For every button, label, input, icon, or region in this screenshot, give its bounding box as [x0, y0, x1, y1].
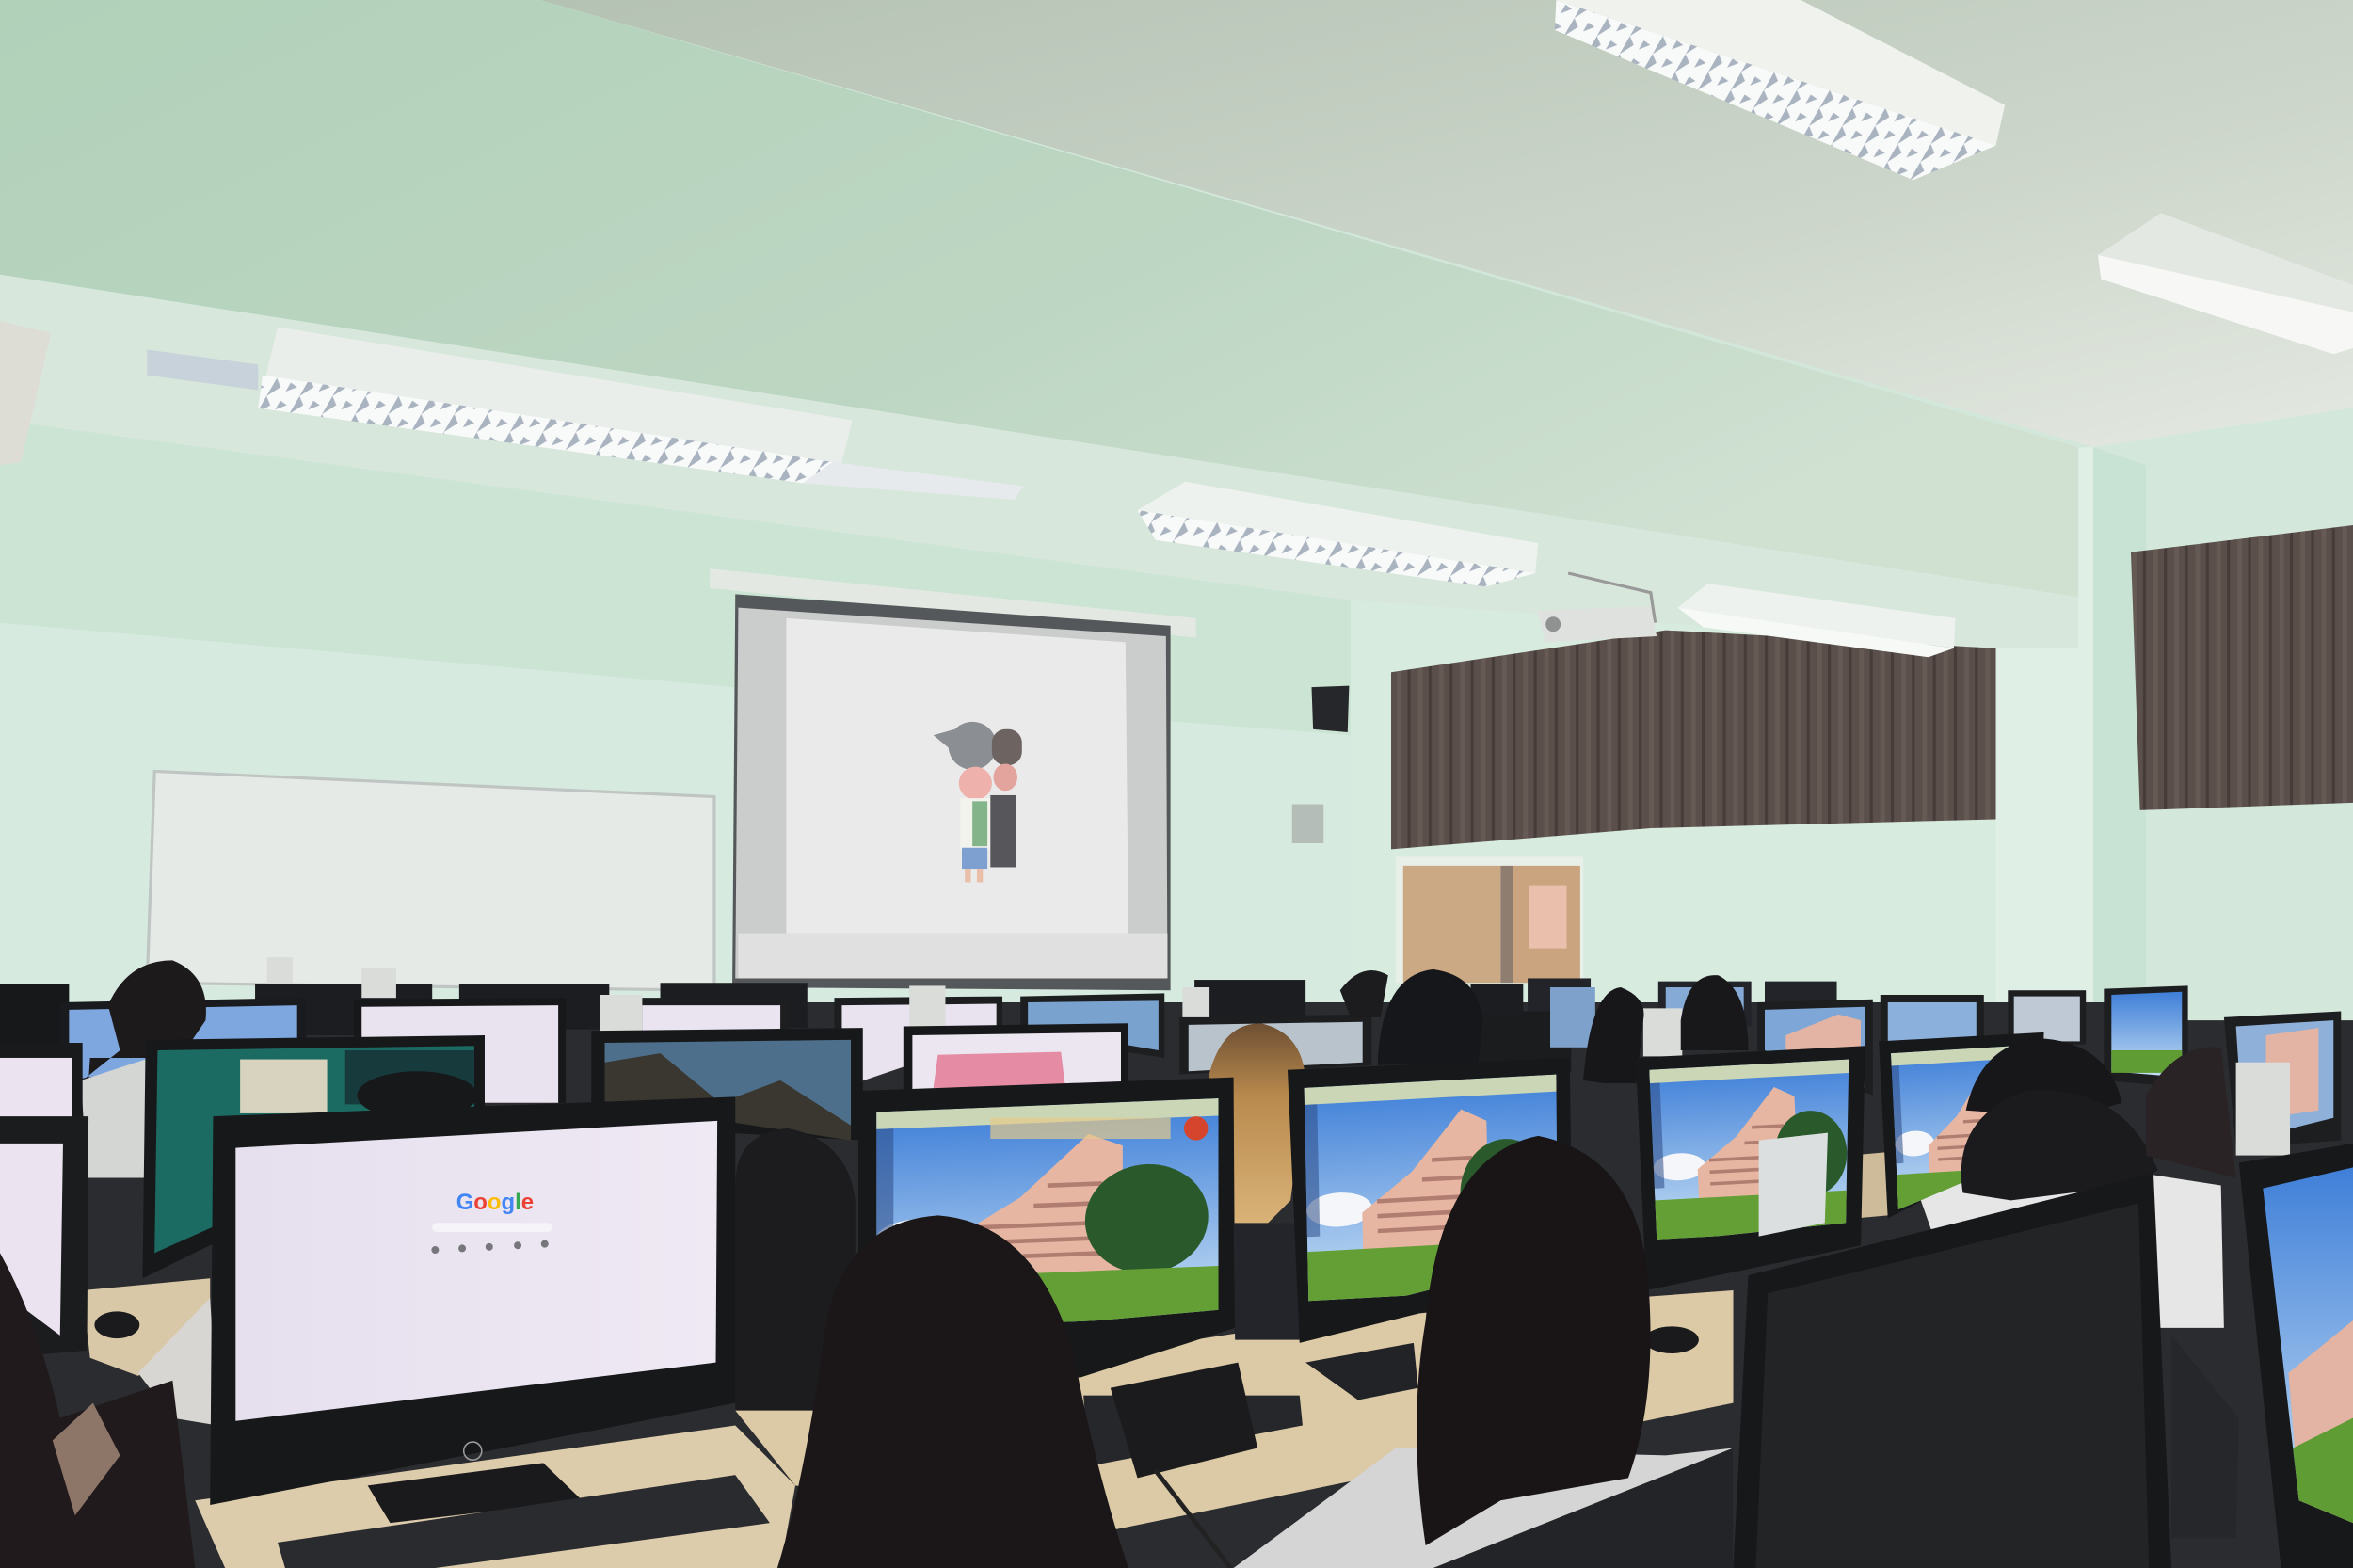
- back right desk: [1850, 1152, 1888, 1219]
- light: long left: [147, 328, 1023, 500]
- base dark floor zone: [0, 1002, 2353, 1568]
- paper notes on monitors: [267, 957, 2290, 1156]
- air conditioner: [0, 321, 51, 465]
- keyboard front: [278, 1475, 770, 1568]
- google wordmark: Google: [456, 1190, 534, 1215]
- wall switch box: [1292, 805, 1323, 843]
- chair grey: [1573, 1083, 1636, 1163]
- black hair student back: [1378, 969, 1482, 1065]
- center-right desk: [735, 1290, 1734, 1530]
- bulkhead face: [0, 0, 2078, 598]
- middle left person (white shirt): [81, 960, 206, 1177]
- mouse right: [1644, 1326, 1699, 1353]
- chair back right: [2171, 1336, 2239, 1538]
- projection screen: [710, 568, 1196, 990]
- upper front wall: [0, 420, 1396, 1002]
- blinds: side wall: [1391, 631, 1996, 849]
- ceiling: [540, 0, 2353, 447]
- column side: [2093, 447, 2146, 1002]
- left desk: [83, 1278, 210, 1376]
- stand: [368, 1463, 583, 1523]
- light: center: [1138, 482, 1538, 586]
- student: right long hair: [1234, 1136, 1734, 1568]
- light: top right: [1555, 0, 2005, 180]
- lower front wall: [0, 623, 1351, 1002]
- far left monitor: [0, 1116, 88, 1358]
- back row monitors: [0, 978, 2341, 1148]
- right wallpaper monitor 1: [1288, 1058, 1573, 1343]
- large monitor back, front right: [1734, 1174, 2171, 1568]
- student middle: [1583, 987, 1644, 1088]
- far right monitor: [2239, 1144, 2353, 1568]
- cartoon characters on screen: [934, 722, 1022, 882]
- student: front center long hair: [777, 1215, 1128, 1568]
- small keyboard center: [1305, 1343, 1418, 1400]
- door: [1396, 856, 1583, 983]
- right wall: [2093, 408, 2353, 1020]
- front left desk: [195, 1426, 795, 1568]
- monitor: teal movie: [142, 1035, 485, 1278]
- whiteboard: [147, 771, 714, 990]
- keyboard center: [1083, 1396, 1303, 1466]
- center wallpaper monitor: [858, 1078, 1235, 1378]
- dark chair behind: [1234, 1223, 1300, 1340]
- far left small monitor: [0, 1043, 83, 1118]
- Google monitor: [210, 1096, 735, 1523]
- speaker: [1311, 686, 1349, 732]
- monitor: mountain wallpaper: [591, 1028, 863, 1141]
- monitor: pink document: [904, 1023, 1128, 1089]
- side wall: [1351, 598, 1996, 1002]
- student in black behind monitors: [735, 1128, 856, 1411]
- right wallpaper monitor 2: [1636, 1046, 1865, 1290]
- blonde student: [1209, 1023, 1305, 1233]
- light: far right: [2098, 213, 2353, 354]
- paper note on monitor: [1759, 1133, 1828, 1237]
- student in white right: [1681, 975, 1748, 1050]
- student: bottom left: [0, 1253, 195, 1568]
- light: near projector: [1678, 584, 1955, 657]
- bulkhead soffit: [0, 275, 2078, 648]
- projector: [1537, 573, 1657, 642]
- students right cluster: [1921, 1038, 2236, 1328]
- column front: [1996, 447, 2093, 1002]
- mouse left: [94, 1311, 139, 1338]
- white-shirt arm left: [138, 1298, 217, 1426]
- right wallpaper monitor 3: [1879, 1032, 2048, 1219]
- ceiling lights: [147, 0, 2353, 657]
- student back center: [1340, 970, 1388, 1017]
- black purse: [1111, 1363, 1257, 1568]
- blinds: right wall: [2131, 525, 2353, 810]
